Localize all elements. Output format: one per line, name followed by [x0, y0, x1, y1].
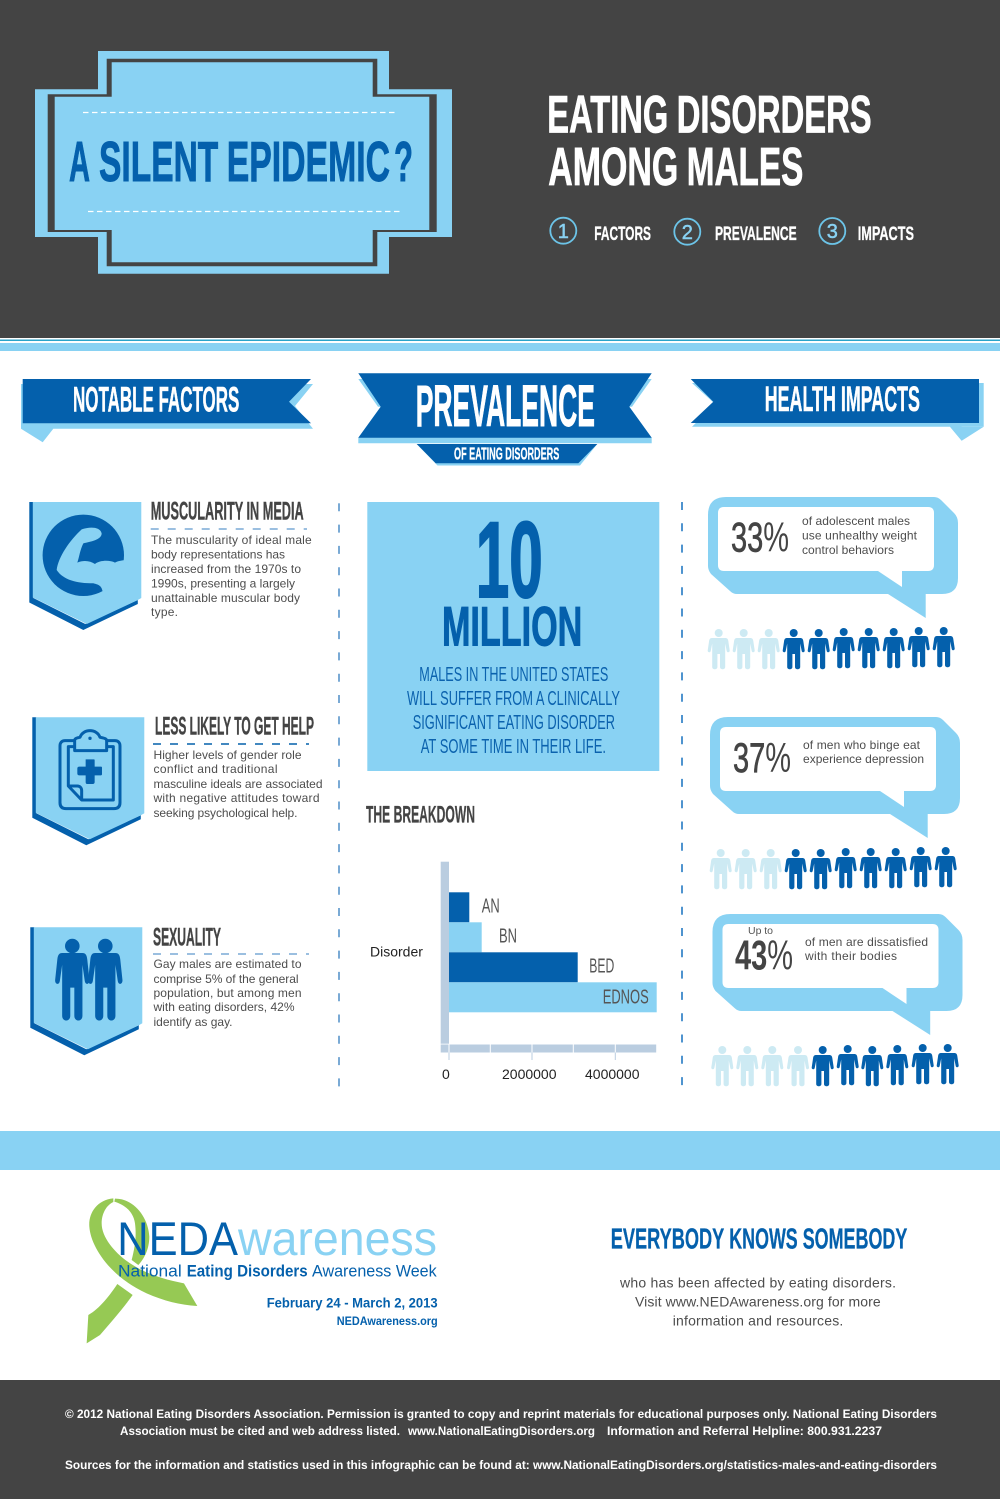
tagline: everybody knows somebody: Visit www.NEDAwareness.org for more	[635, 1294, 881, 1310]
logo: NEDAwareness week: Awareness Week	[312, 1262, 437, 1281]
title badge: a silent epidemic	[35, 51, 452, 274]
bar labels: AN	[482, 896, 500, 918]
footer: Association must be cited and web address listed.	[120, 1424, 400, 1438]
statistic text	[803, 738, 924, 766]
title badge: a silent epidemic: EPIDEMIC	[227, 130, 390, 194]
tagline: everybody knows somebody	[611, 1223, 907, 1329]
main heading: eating disorders among males: DISORDERS	[677, 86, 872, 144]
body text: masculine ideals are associated	[154, 777, 322, 791]
body text: body representations has	[151, 548, 285, 562]
icon row: 4 of 10 figures	[711, 1044, 959, 1086]
icon row: 3 of 10 figures	[710, 847, 957, 889]
heading: MUSCULARITY IN MEDIA	[151, 497, 304, 525]
footer: © 2012 National Eating Disorders Association. Permission is granted to copy and reprint materials for educational purposes only. National Eating Disorders	[65, 1407, 937, 1421]
panel: 33 percent stat	[708, 497, 958, 618]
tagline: everybody knows somebody: KNOWS	[729, 1223, 798, 1255]
body text	[152, 748, 322, 820]
axis labels: Disorder	[370, 944, 423, 960]
logo: NEDAwareness week: NEDAwareness.org	[337, 1314, 438, 1328]
logo: NEDAwareness week: February 24 - March 2, 2013	[267, 1295, 438, 1311]
panel: 10 million callout	[367, 499, 659, 771]
bar labels: EDNOS	[603, 986, 649, 1008]
icon: two men shield	[30, 927, 142, 1055]
footer: www.NationalEatingDisorders.org	[407, 1424, 595, 1438]
ribbon: prevalence: PREVALENCE	[416, 374, 595, 439]
main heading: eating disorders among males: AMONG	[548, 137, 678, 197]
body text: increased from the 1970s to	[151, 562, 301, 576]
main heading: eating disorders among males: EATING	[547, 86, 668, 144]
panel: 43 percent stat	[712, 914, 962, 1035]
axis labels	[370, 944, 640, 1082]
statistic: 33%	[731, 514, 789, 561]
bars	[449, 892, 657, 1012]
section index: factors, prevalence, impacts: PREVALENCE	[715, 223, 797, 245]
footer: Information and Referral Helpline: 800.931.2237	[607, 1424, 882, 1438]
body text: Gay males are estimated to	[154, 957, 302, 971]
footer	[0, 1380, 1000, 1499]
statistic: 37%	[733, 734, 791, 781]
panel: 10 million callout: WILL SUFFER FROM A CLINICALLY	[407, 687, 620, 710]
panel: 10 million callout: 10	[476, 499, 543, 620]
panel: 10 million callout: MALES IN THE UNITED STATES	[419, 663, 608, 686]
speech bubble	[710, 717, 960, 838]
bar chart: disorder breakdown	[370, 862, 657, 1082]
panel: 43 percent stat: 43%	[735, 931, 793, 978]
footer: Sources for the information and statistics used in this infographic can be found at: www.NationalEatingDisorders.org/statistics-males-and-eating-disorders	[65, 1458, 937, 1472]
ribbon: health impacts	[691, 379, 984, 441]
body text: 1990s, presenting a largely	[151, 576, 295, 590]
bar labels	[482, 896, 649, 1008]
icon: flexed arm shield	[29, 502, 141, 630]
header band	[0, 0, 1000, 351]
panel: less likely to get help	[32, 712, 323, 845]
body text: type.	[151, 605, 178, 619]
heading: the breakdown: THE BREAKDOWN	[366, 801, 475, 828]
axis labels: 2000000	[502, 1066, 557, 1082]
icon row: 3 of 10 figures	[708, 627, 955, 669]
logo: NEDAwareness week: National	[118, 1262, 182, 1281]
statistic text: of men are dissatisfied	[805, 935, 928, 949]
statistic text: control behaviors	[802, 543, 894, 557]
icon: medical clipboard shield	[32, 717, 144, 845]
speech bubble	[712, 914, 962, 1035]
tagline: everybody knows somebody: information and resources.	[673, 1313, 843, 1329]
body text	[151, 533, 312, 619]
ribbon: prevalence	[358, 373, 652, 466]
body text: with negative attitudes toward	[152, 791, 320, 805]
section index: factors, prevalence, impacts: 3	[827, 221, 838, 243]
panel: 10 million callout: AT SOME TIME IN THEIR LIFE.	[421, 735, 606, 758]
panel: 37 percent stat	[710, 717, 960, 838]
statistic text: of adolescent males	[802, 514, 910, 528]
section index: factors, prevalence, impacts: IMPACTS	[858, 223, 914, 245]
logo: NEDAwareness week	[87, 1198, 438, 1343]
ribbon: notable factors: NOTABLE FACTORS	[73, 380, 239, 419]
body text: identify as gay.	[154, 1015, 232, 1029]
main heading: eating disorders among males: MALES	[687, 137, 803, 197]
icon: green ribbon	[87, 1198, 197, 1343]
tagline: everybody knows somebody: EVERYBODY	[611, 1223, 724, 1255]
panel: less likely to get help: LESS LIKELY TO GET HELP	[155, 712, 314, 740]
section index: factors, prevalence, impacts: FACTORS	[594, 223, 651, 245]
main heading: eating disorders among males	[547, 86, 872, 197]
statistic text	[804, 935, 928, 963]
panel: 10 million callout: MILLION	[442, 595, 582, 658]
section index: factors, prevalence, impacts: 2	[682, 222, 693, 244]
title badge: a silent epidemic: SILENT	[99, 130, 218, 194]
bar labels: BED	[589, 956, 614, 978]
body text: The muscularity of ideal male	[151, 533, 312, 547]
statistic text: of men who binge eat	[803, 738, 921, 752]
section index: factors, prevalence, impacts: 1	[558, 221, 569, 243]
logo: NEDAwareness week: Eating Disorders	[187, 1262, 308, 1281]
logo: NEDAwareness week: wareness	[237, 1213, 437, 1266]
body text: with eating disorders, 42%	[152, 1000, 295, 1014]
tagline: everybody knows somebody: who has been affected by eating disorders.	[619, 1275, 896, 1291]
statistic text: with their bodies	[804, 949, 897, 963]
statistic text	[802, 514, 918, 557]
body text: conflict and traditional	[154, 762, 278, 776]
title badge: a silent epidemic: ?	[394, 130, 413, 194]
axis labels: 0	[442, 1066, 450, 1082]
body text: population, but among men	[154, 986, 302, 1000]
panel: 10 million callout: SIGNIFICANT EATING DISORDER	[413, 711, 615, 734]
ribbon: prevalence: OF EATING DISORDERS	[454, 444, 559, 464]
body text: comprise 5% of the general	[154, 972, 298, 986]
axis labels: 4000000	[585, 1066, 640, 1082]
logo: NEDAwareness week: NEDA	[117, 1212, 239, 1265]
title badge: a silent epidemic: A	[69, 130, 90, 194]
statistic text: experience depression	[803, 752, 924, 766]
panel: sexuality	[30, 924, 309, 1055]
statistic: Up to	[748, 925, 773, 937]
body text: unattainable muscular body	[151, 591, 300, 605]
statistic text: use unhealthy weight	[802, 528, 918, 542]
speech bubble	[708, 497, 958, 618]
column dividers	[339, 502, 682, 1092]
tagline: everybody knows somebody: SOMEBODY	[803, 1223, 907, 1255]
panel: muscularity in media	[29, 497, 312, 630]
body text	[152, 957, 302, 1029]
body text: Higher levels of gender role	[154, 748, 302, 762]
section index: factors, prevalence, impacts	[550, 218, 914, 245]
ribbon: notable factors	[21, 379, 313, 442]
light blue band	[0, 1131, 1000, 1170]
body text: seeking psychological help.	[154, 806, 298, 820]
bar labels: BN	[499, 926, 517, 948]
panel: sexuality: SEXUALITY	[153, 924, 221, 952]
